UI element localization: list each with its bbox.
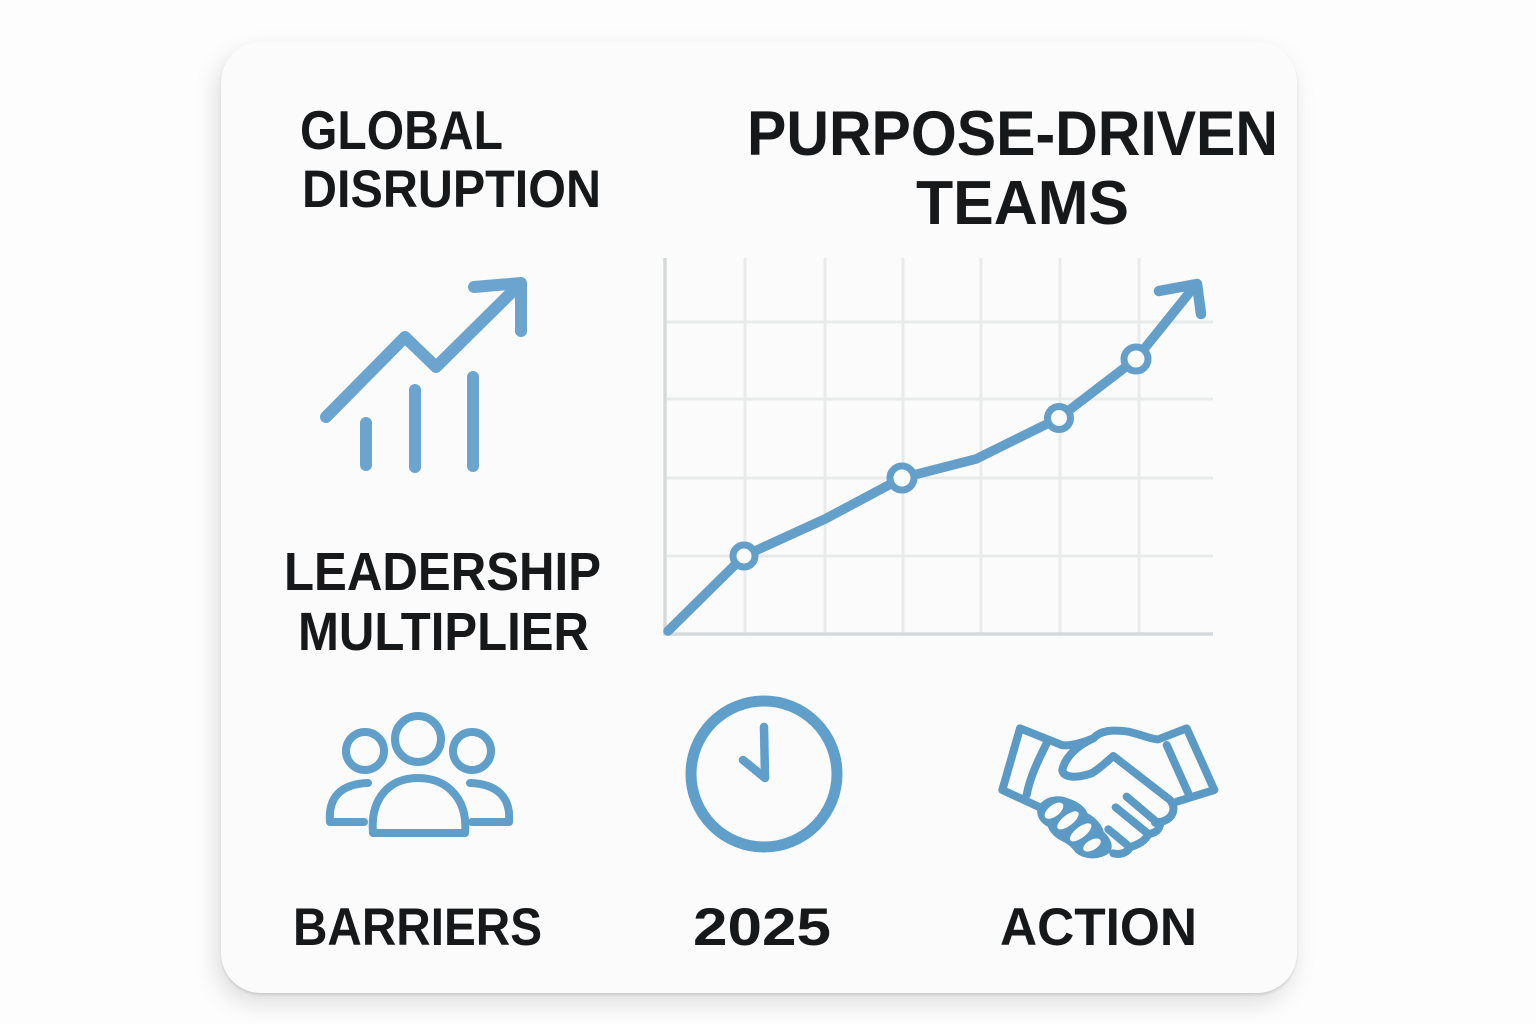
label: 2025: 2025 bbox=[693, 898, 831, 957]
icon: growth chart bbox=[326, 283, 521, 467]
heading: leadership multiplier: MULTIPLIER bbox=[298, 602, 589, 662]
label: action: ACTION bbox=[1000, 898, 1197, 957]
heading: global disruption bbox=[300, 99, 601, 219]
heading: global disruption: DISRUPTION bbox=[302, 160, 601, 219]
line chart bbox=[665, 258, 1213, 634]
heading: leadership multiplier bbox=[284, 542, 601, 662]
heading: purpose-driven teams bbox=[747, 99, 1278, 238]
heading: purpose-driven teams: TEAMS bbox=[916, 169, 1129, 238]
icon: handshake bbox=[1002, 728, 1214, 858]
icon: clock bbox=[691, 701, 837, 847]
panel: card bbox=[221, 42, 1297, 993]
icon: team bbox=[330, 716, 509, 833]
label: barriers: BARRIERS bbox=[293, 898, 542, 957]
heading: global disruption: GLOBAL bbox=[300, 99, 503, 161]
heading: purpose-driven teams: PURPOSE-DRIVEN bbox=[747, 99, 1278, 169]
heading: leadership multiplier: LEADERSHIP bbox=[284, 542, 601, 602]
